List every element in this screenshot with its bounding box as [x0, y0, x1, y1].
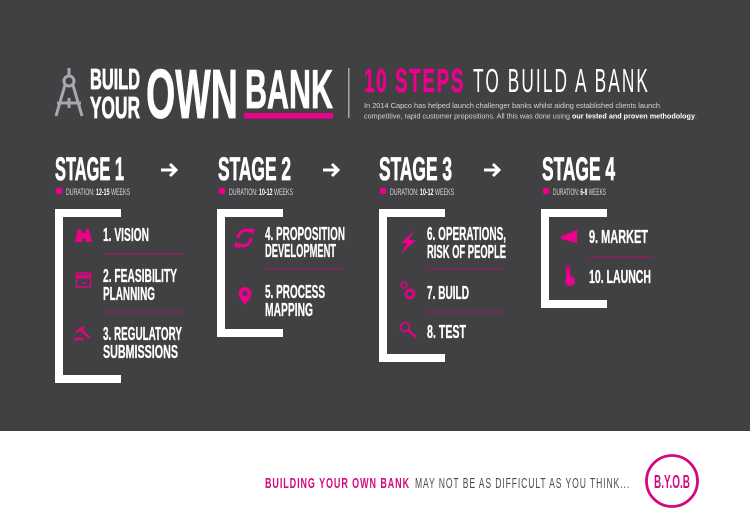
intro text: In 2014 Capco has helped launch challenger banks whilst aiding established clients launch	[364, 101, 660, 110]
icon: megaphone	[561, 230, 577, 243]
footer badge: b.y.o.b	[646, 456, 698, 506]
footer tagline: BUILDING YOUR OWN BANK	[265, 476, 410, 492]
intro text	[364, 101, 697, 120]
stage 1 duration: DURATION: 12-15 WEEKS	[66, 187, 130, 198]
arrow: stage 2 to 3	[323, 164, 338, 176]
logo text: bank: BANK	[245, 58, 333, 120]
arrow: stage 3 to 4	[484, 164, 499, 176]
icon: gears	[401, 282, 414, 298]
heading: 10 steps to build a bank: 10 STEPS	[364, 62, 465, 99]
stage 2 duration: DURATION: 10-12 WEEKS	[229, 187, 293, 198]
icon: magnifying glass	[400, 322, 416, 337]
stage 3 bracket	[383, 213, 445, 358]
stage 4	[542, 151, 652, 304]
arrow: stage 1 to 2	[161, 164, 176, 176]
step 3: SUBMISSIONS	[103, 342, 178, 362]
step 6: RISK OF PEOPLE	[427, 242, 506, 262]
icon: launch button hand	[565, 265, 575, 286]
logo text: build: BUILD	[90, 64, 140, 96]
logo text: own: OWN	[146, 55, 238, 133]
stage 4 heading: STAGE 4	[542, 151, 615, 187]
logo underline	[244, 113, 333, 118]
icon: gavel	[74, 327, 90, 339]
logo: build your own bank	[56, 55, 333, 133]
step 2: PLANNING	[103, 284, 155, 304]
stage 3 duration: DURATION: 10-12 WEEKS	[390, 187, 454, 198]
icon: map pin	[238, 287, 252, 304]
stage 2	[218, 151, 345, 333]
icon: refresh arrows	[234, 228, 255, 248]
stage 4 duration: DURATION: 6-8 WEEKS	[553, 187, 606, 198]
stage 3 heading: STAGE 3	[379, 151, 452, 187]
step 3: 3. REGULATORY	[103, 324, 182, 344]
stage 3	[379, 151, 506, 358]
heading: 10 steps to build a bank	[364, 62, 650, 99]
footer tagline	[265, 476, 630, 492]
step 1: 1. VISION	[103, 225, 149, 245]
step 7: 7. BUILD	[427, 283, 469, 303]
icon: binoculars	[75, 229, 92, 242]
icon: drafting compass	[56, 68, 82, 116]
step 8: 8. TEST	[427, 322, 466, 342]
step 9: 9. MARKET	[589, 227, 648, 247]
step 6: 6. OPERATIONS,	[427, 224, 506, 244]
step 2: 2. FEASIBILITY	[103, 266, 177, 286]
header divider	[348, 68, 350, 118]
step 5: MAPPING	[265, 300, 313, 320]
icon: calendar	[76, 273, 91, 287]
stage 2 heading: STAGE 2	[218, 151, 291, 187]
stage 1	[55, 151, 184, 379]
step 4: 4. PROPOSITION	[265, 224, 345, 244]
step 10: 10. LAUNCH	[589, 267, 651, 287]
stage 2 bracket	[221, 213, 283, 333]
step 4: DEVELOPMENT	[265, 241, 336, 261]
logo text: your: YOUR	[90, 90, 140, 125]
intro text: competitive, rapid customer propositions. All this was done using our tested and proven methodology.	[364, 112, 697, 120]
icon: lightning bolt	[401, 231, 416, 254]
stage 1 bracket	[59, 213, 121, 379]
footer panel	[0, 431, 750, 529]
step 5: 5. PROCESS	[265, 282, 325, 302]
stage 4 duration	[542, 187, 606, 198]
stage 4 bracket	[545, 213, 607, 304]
stage 1 heading: STAGE 1	[55, 151, 124, 187]
footer badge: b.y.o.b: B.Y.O.B	[654, 472, 690, 492]
